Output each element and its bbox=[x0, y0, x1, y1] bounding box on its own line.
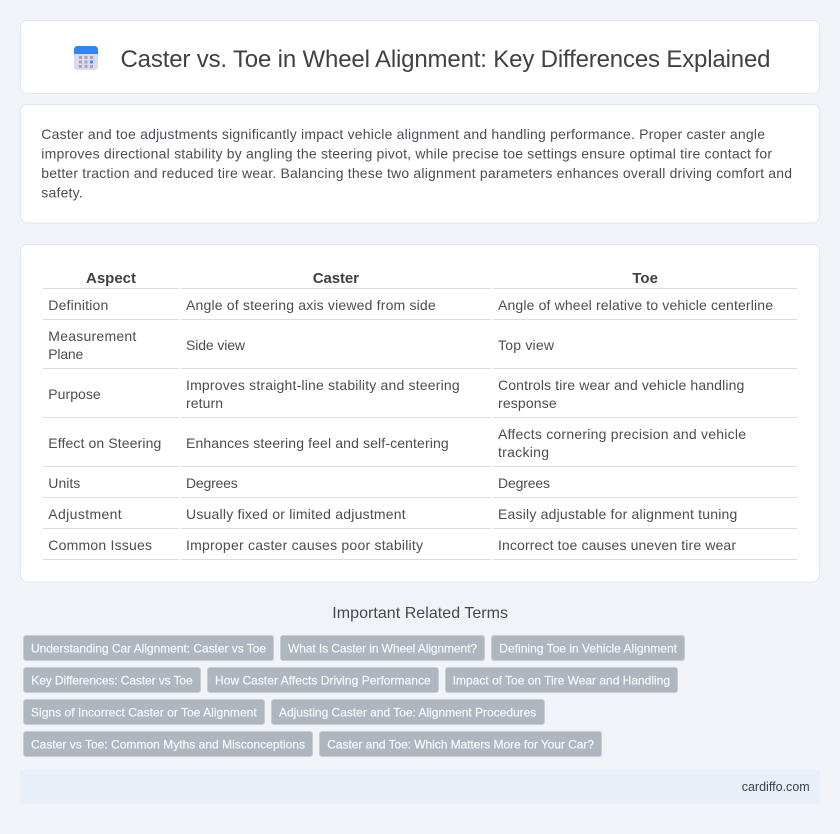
title: Caster vs. Toe in Wheel Alignment: Key Differences Explained bbox=[120, 46, 770, 73]
intro text: Caster and toe adjustments significantly impact vehicle alignment and handling performance. Proper caster angle bbox=[41, 126, 765, 142]
row: purpose bbox=[48, 377, 744, 411]
row: measurement plane: Measurement bbox=[48, 328, 136, 344]
row: purpose: Improves straight-line stability and steering bbox=[186, 377, 460, 393]
row: adjustment bbox=[48, 506, 737, 522]
row: units: Degrees bbox=[498, 475, 550, 491]
tag: Understanding Car Alignment: Caster vs Toe bbox=[31, 641, 266, 655]
row: purpose: Controls tire wear and vehicle handling bbox=[498, 377, 744, 393]
tag bbox=[492, 636, 684, 660]
intro text: safety. bbox=[41, 184, 83, 200]
tag: Defining Toe in Vehicle Alignment bbox=[499, 641, 678, 655]
heading: important related terms: Important Related Terms bbox=[332, 605, 508, 622]
row: measurement plane bbox=[48, 328, 555, 362]
row: purpose: response bbox=[498, 395, 557, 411]
row: effect on steering bbox=[48, 426, 746, 460]
row: adjustment: Adjustment bbox=[48, 506, 122, 522]
table header: Caster bbox=[313, 270, 359, 287]
footer source text: cardiffo.com bbox=[742, 780, 810, 794]
tag bbox=[272, 700, 544, 724]
row: purpose: Purpose bbox=[48, 386, 101, 402]
row: definition: Angle of steering axis viewed from side bbox=[186, 297, 436, 313]
intro text: improves directional stability by angling the steering pivot, while precise toe settings ensure optimal tire contact for bbox=[41, 146, 772, 162]
intro text: better traction and reduced tire wear. Balancing these two alignment parameters enhances overall driving comfort and bbox=[41, 165, 792, 181]
row: measurement plane: Top view bbox=[498, 337, 555, 353]
header panel bbox=[20, 20, 820, 94]
tag bbox=[446, 668, 678, 692]
row: adjustment: Usually fixed or limited adjustment bbox=[186, 506, 406, 522]
intro text bbox=[41, 126, 792, 200]
row: common issues bbox=[48, 537, 736, 553]
table rules bbox=[43, 288, 797, 560]
row: effect on steering: Enhances steering feel and self-centering bbox=[186, 435, 449, 451]
row: definition bbox=[48, 297, 773, 313]
tag: Caster vs Toe: Common Myths and Misconceptions bbox=[31, 737, 305, 751]
table header: Toe bbox=[632, 270, 658, 287]
related terms tags bbox=[24, 636, 684, 756]
tag: Adjusting Caster and Toe: Alignment Procedures bbox=[279, 705, 536, 719]
row: definition: Angle of wheel relative to vehicle centerline bbox=[498, 297, 773, 313]
table header bbox=[86, 270, 658, 287]
row: units: Degrees bbox=[186, 475, 238, 491]
icon: calendar bbox=[74, 46, 98, 70]
row: common issues: Incorrect toe causes uneven tire wear bbox=[498, 537, 736, 553]
tag bbox=[24, 636, 274, 660]
row: units: Units bbox=[48, 475, 80, 491]
row: measurement plane: Side view bbox=[186, 337, 246, 353]
tag: Caster and Toe: Which Matters More for Your Car? bbox=[327, 737, 594, 751]
tag: Key Differences: Caster vs Toe bbox=[31, 673, 193, 687]
panel: comparison table bbox=[20, 244, 820, 582]
row: effect on steering: tracking bbox=[498, 444, 549, 460]
row: adjustment: Easily adjustable for alignment tuning bbox=[498, 506, 737, 522]
footer bar bbox=[20, 770, 820, 804]
row: units bbox=[48, 475, 550, 491]
tag bbox=[280, 636, 484, 660]
tag bbox=[24, 700, 264, 724]
row: measurement plane: Plane bbox=[48, 346, 84, 362]
row: definition: Definition bbox=[48, 297, 108, 313]
tag: Signs of Incorrect Caster or Toe Alignment bbox=[31, 705, 257, 719]
table header: Aspect bbox=[86, 270, 136, 287]
tag bbox=[24, 732, 312, 756]
row: common issues: Improper caster causes poor stability bbox=[186, 537, 423, 553]
tag bbox=[320, 732, 602, 756]
tag bbox=[24, 668, 200, 692]
row: common issues: Common Issues bbox=[48, 537, 152, 553]
row: purpose: return bbox=[186, 395, 223, 411]
row: effect on steering: Affects cornering precision and vehicle bbox=[498, 426, 746, 442]
panel: introduction bbox=[20, 104, 820, 223]
tag: What Is Caster in Wheel Alignment? bbox=[288, 641, 477, 655]
tag: Impact of Toe on Tire Wear and Handling bbox=[453, 673, 670, 687]
tag bbox=[208, 668, 438, 692]
tag: How Caster Affects Driving Performance bbox=[215, 673, 431, 687]
row: effect on steering: Effect on Steering bbox=[48, 435, 161, 451]
